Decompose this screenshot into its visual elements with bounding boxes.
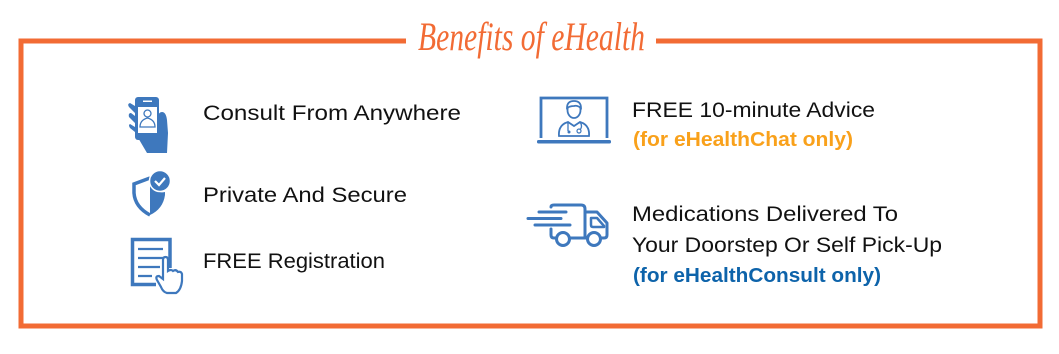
note: for eHealthConsult only: (for eHealthConsult only) (633, 265, 881, 287)
text: medications delivered (632, 202, 942, 287)
text: free registration: FREE Registration (203, 249, 385, 273)
text: free 10-minute advice (632, 98, 875, 151)
text: free 10-minute advice: FREE 10-minute Advice (632, 98, 875, 122)
text: medications delivered: Medications Delivered To (632, 202, 898, 226)
title: Benefits of eHealth (418, 14, 645, 59)
text: medications delivered: Your Doorstep Or Self Pick-Up (632, 233, 942, 257)
icon: doctor on laptop (537, 98, 611, 144)
icon: delivery truck (528, 205, 607, 246)
note: for eHealthChat only: (for eHealthChat only) (633, 129, 853, 151)
icon: shield with check (134, 170, 170, 215)
icon: hand holding phone (128, 97, 168, 153)
text: consult from anywhere: Consult From Anywhere (203, 101, 461, 125)
panel: orange frame (21, 41, 1040, 326)
icon: document with hand (132, 240, 182, 293)
text: private and secure: Private And Secure (203, 183, 407, 207)
